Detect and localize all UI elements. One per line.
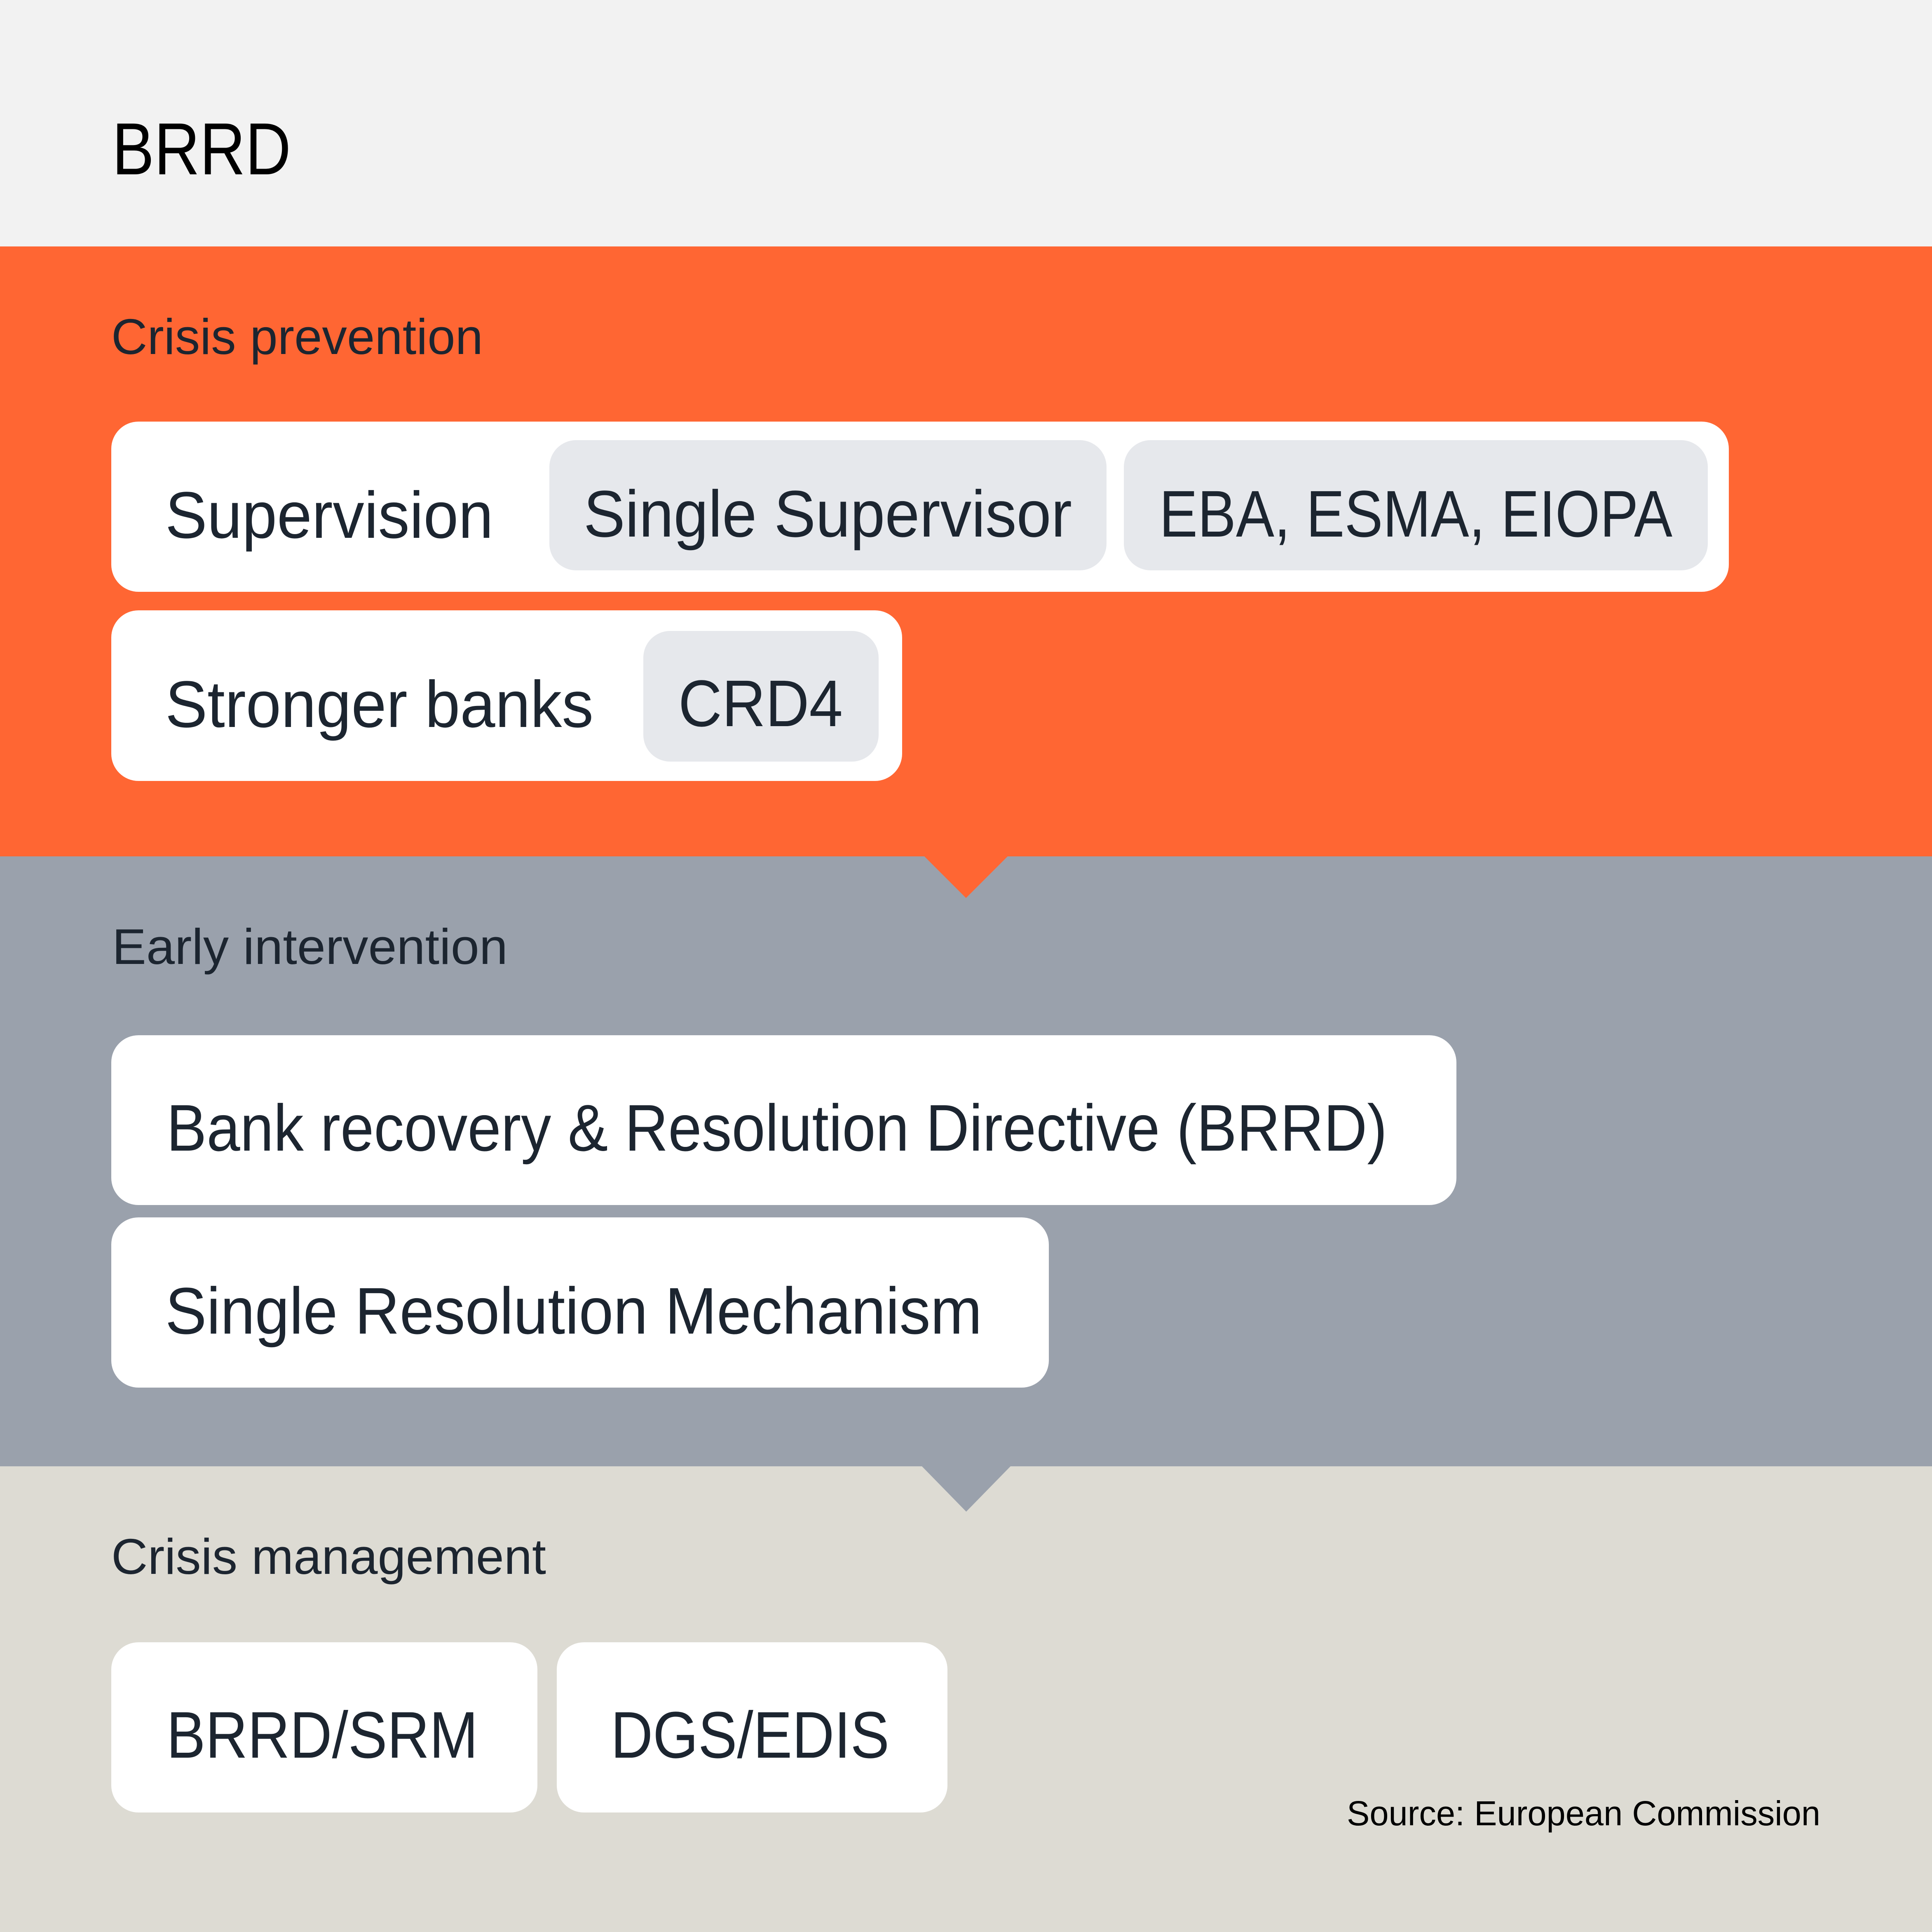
heading: early intervention: Early intervention bbox=[112, 919, 508, 975]
source note: Source: European Commission bbox=[1347, 1794, 1820, 1833]
card: DGS/EDIS bbox=[557, 1642, 947, 1812]
panel: crisis prevention bbox=[0, 246, 1932, 856]
panel: crisis management bbox=[0, 1466, 1932, 1932]
heading: crisis management: Crisis management bbox=[111, 1529, 546, 1585]
arrow: early intervention to crisis management bbox=[922, 1466, 1011, 1512]
card: Single Resolution Mechanism: Single Resolution Mechanism bbox=[165, 1274, 982, 1348]
panel: early intervention bbox=[0, 856, 1932, 1466]
chip: CRD4: CRD4 bbox=[678, 666, 843, 740]
chip: Single Supervisor bbox=[549, 440, 1107, 570]
card: Bank recovery and Resolution Directive bbox=[111, 1035, 1456, 1205]
chip: EBA, ESMA, EIOPA: EBA, ESMA, EIOPA bbox=[1159, 477, 1672, 551]
card: DGS/EDIS: DGS/EDIS bbox=[611, 1698, 889, 1772]
card: Bank recovery and Resolution Directive: Bank recovery & Resolution Directive (BRRD) bbox=[166, 1091, 1387, 1165]
card: Single Resolution Mechanism bbox=[111, 1217, 1049, 1388]
card: supervision: Supervision bbox=[165, 478, 493, 552]
card: BRRD/SRM: BRRD/SRM bbox=[166, 1698, 478, 1772]
card: BRRD/SRM bbox=[111, 1642, 537, 1812]
card: stronger banks: Stronger banks bbox=[165, 667, 593, 741]
header band bbox=[0, 0, 1932, 246]
card: stronger banks bbox=[111, 610, 902, 781]
card: supervision bbox=[111, 422, 1729, 592]
chip: EBA, ESMA, EIOPA bbox=[1124, 440, 1708, 570]
arrow: crisis prevention to early intervention bbox=[924, 856, 1008, 898]
heading: crisis prevention: Crisis prevention bbox=[111, 309, 483, 365]
chip: Single Supervisor: Single Supervisor bbox=[584, 477, 1072, 551]
chip: CRD4 bbox=[643, 631, 879, 762]
title: BRRD bbox=[112, 108, 291, 190]
